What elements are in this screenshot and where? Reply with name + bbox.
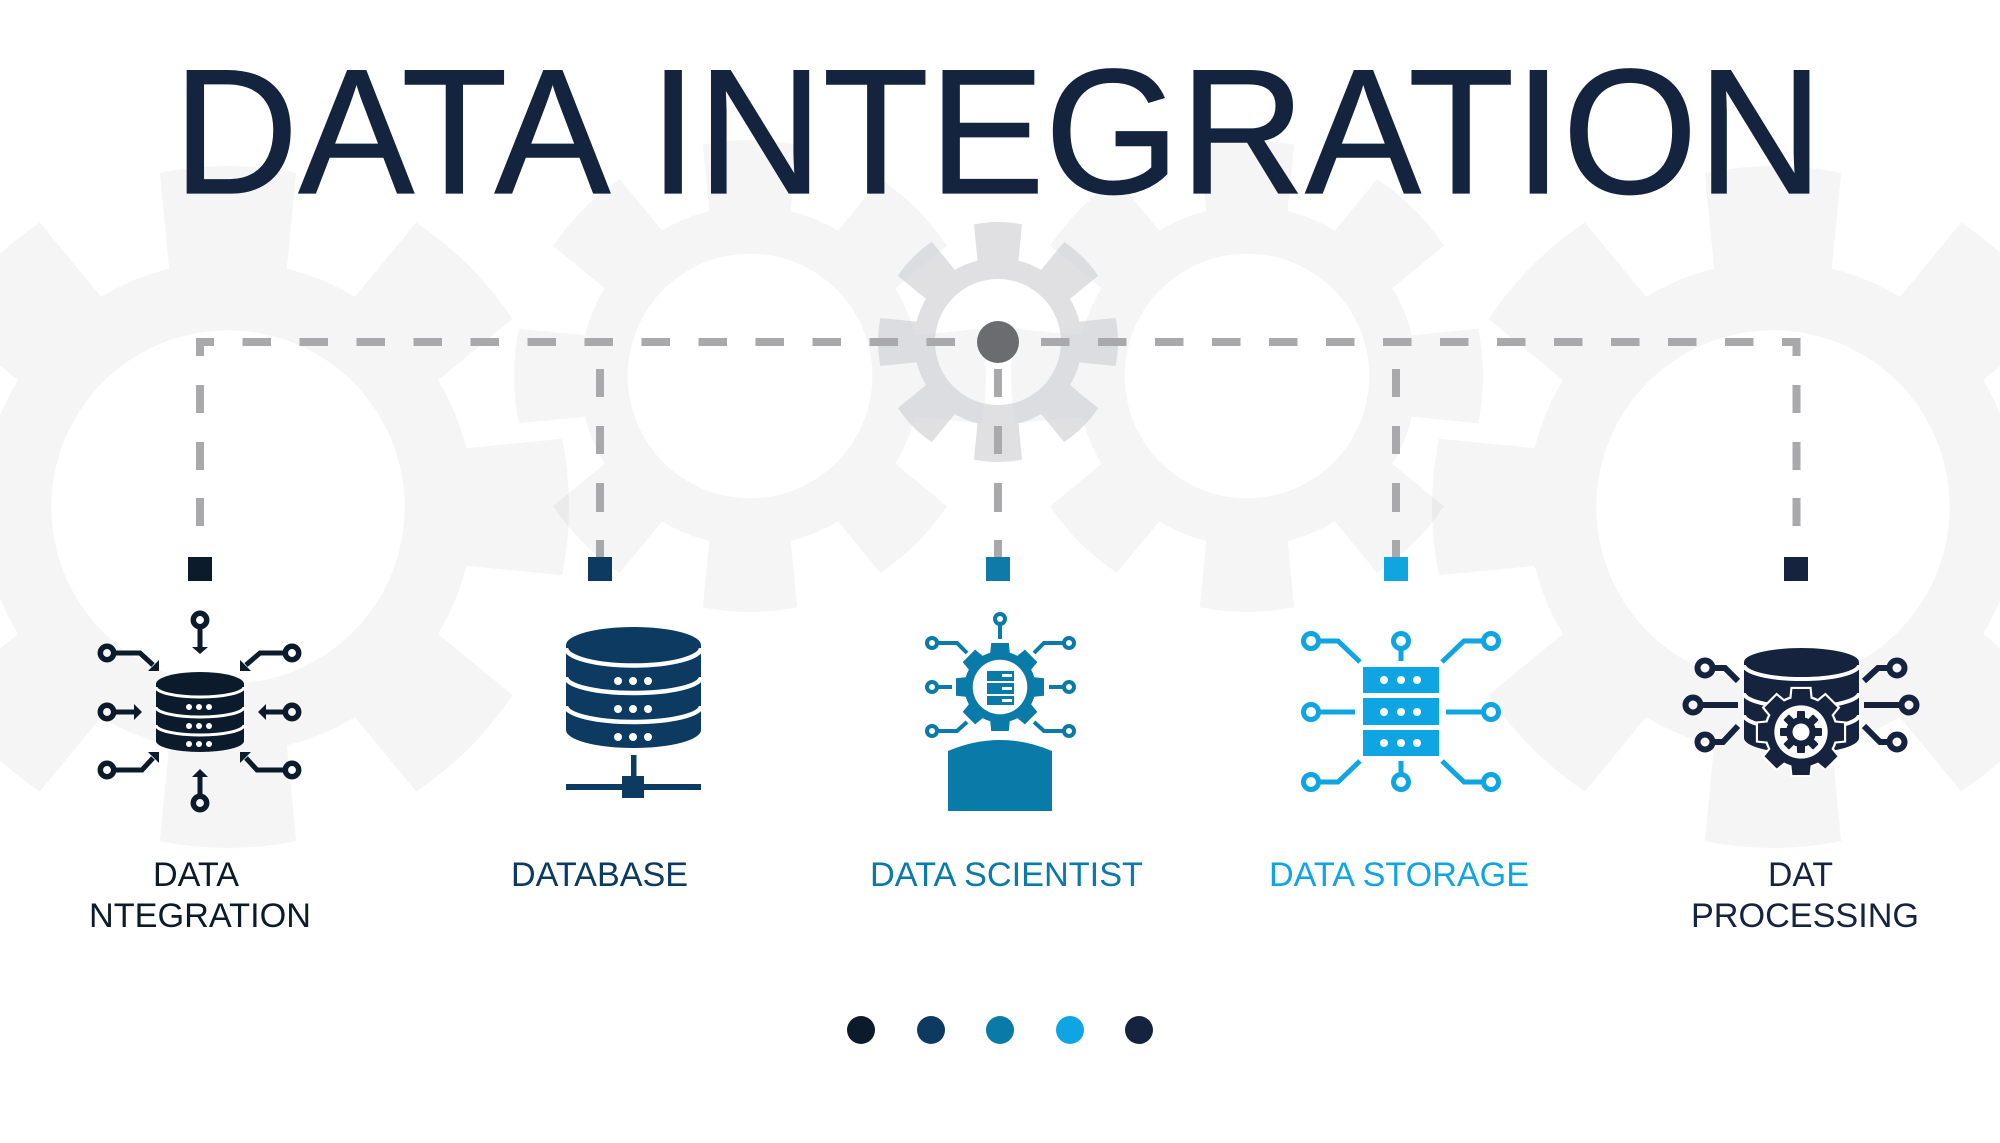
label: data storage: DATA STORAGE	[1269, 856, 1529, 894]
icon: data processing	[1686, 648, 1916, 775]
label: database: DATABASE	[511, 856, 688, 894]
central gear	[878, 222, 1118, 462]
label: data processing: PROCESSING	[1691, 897, 1919, 935]
label: data processing	[1691, 856, 1919, 935]
icon: data integration	[100, 613, 299, 810]
center hub dot	[977, 321, 1019, 363]
label: data processing: DAT	[1768, 856, 1833, 894]
icon: database	[566, 627, 701, 798]
title: DATA INTEGRATION	[173, 32, 1823, 231]
label: data scientist: DATA SCIENTIST	[870, 856, 1143, 894]
label: data integration: NTEGRATION	[89, 897, 311, 935]
pagination dots	[847, 1016, 1153, 1044]
background gears	[0, 140, 2000, 848]
icon: data storage	[1304, 634, 1498, 790]
connector end squares	[188, 557, 1808, 581]
dashed connector lines	[196, 338, 1800, 557]
label: data integration: DATA	[153, 856, 239, 894]
icon: data scientist	[927, 614, 1074, 811]
label: data integration	[89, 856, 311, 935]
